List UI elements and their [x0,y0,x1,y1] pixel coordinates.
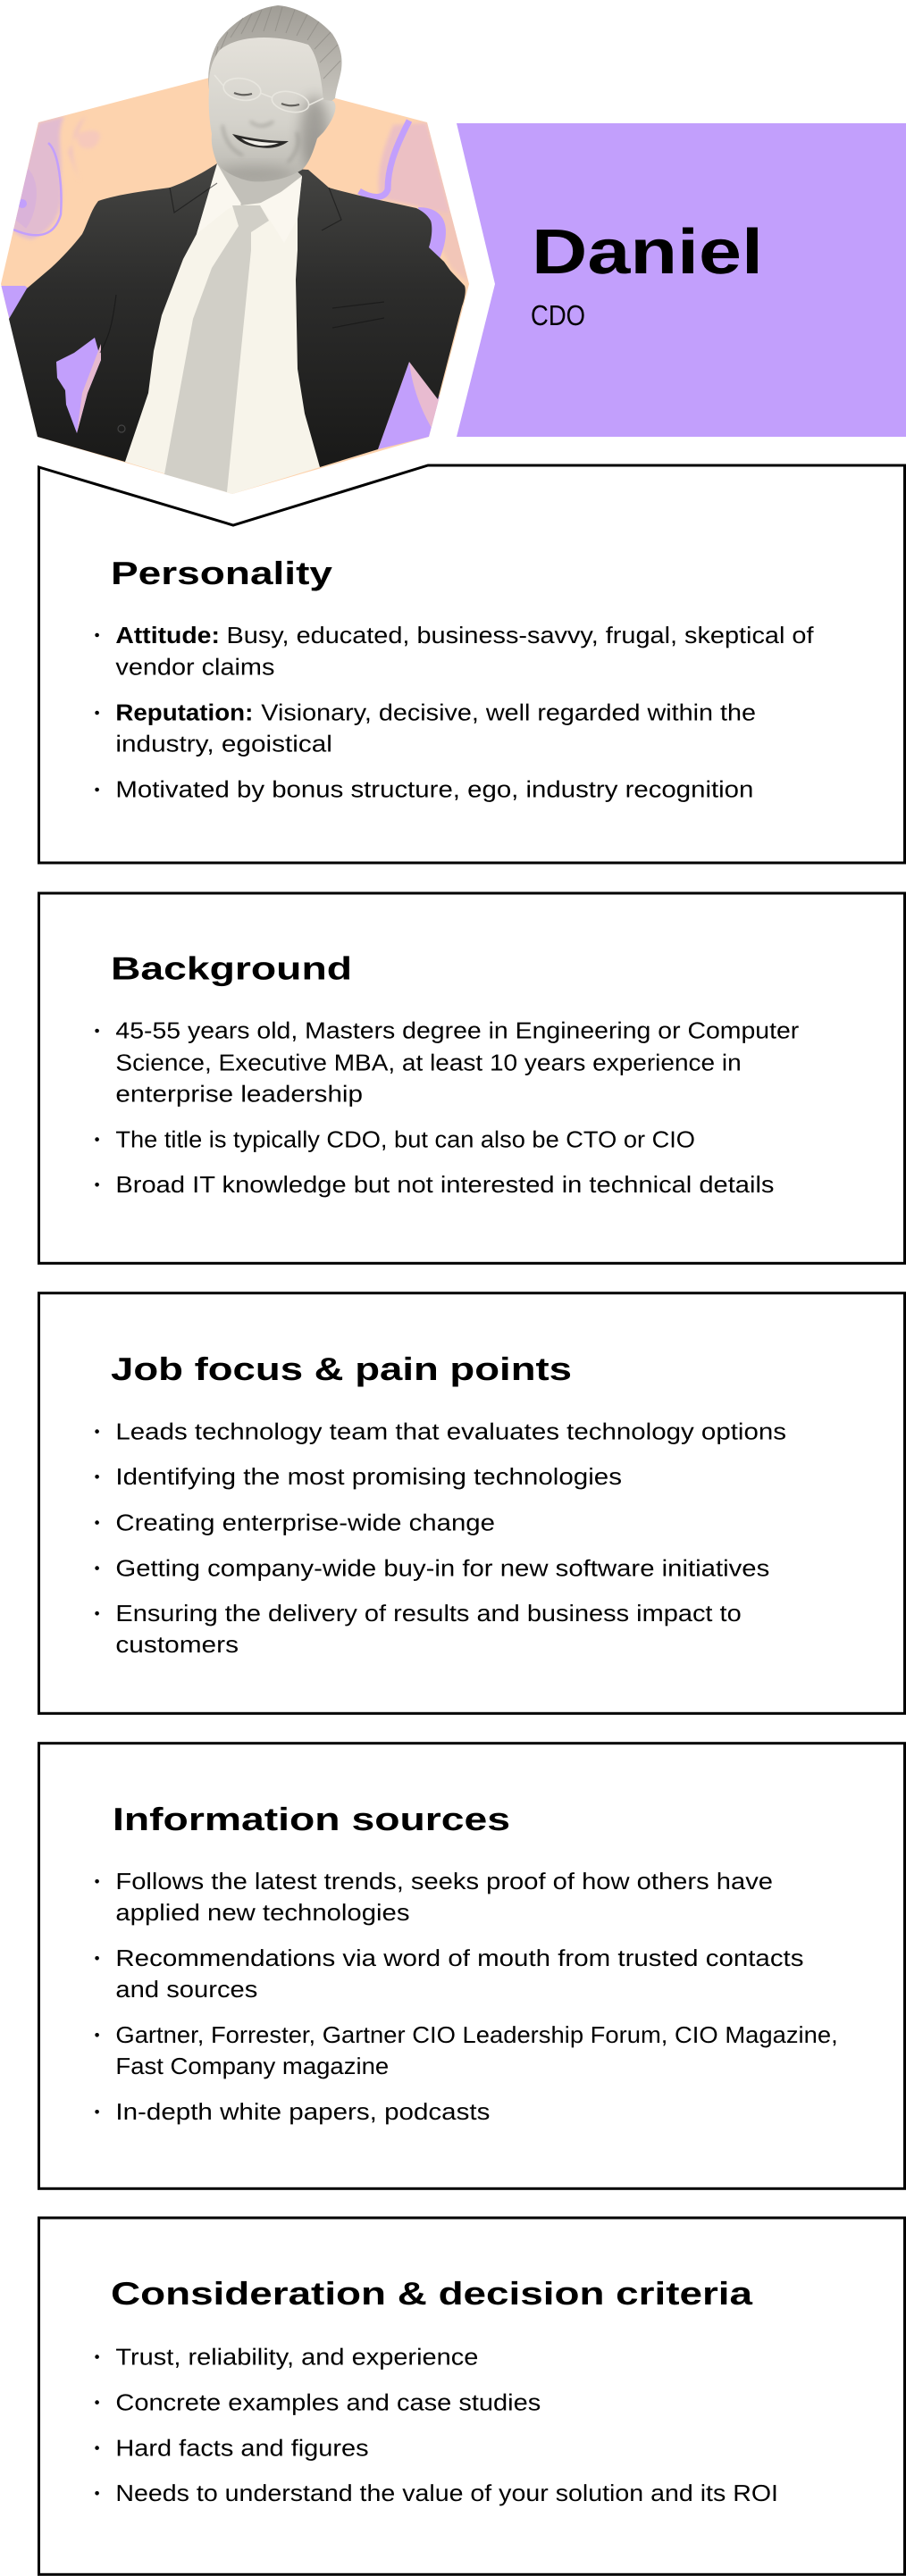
shirt [125,163,320,494]
shirt collar [197,165,241,234]
face [209,38,335,182]
list: job focus: Creating enterprise-wide change [115,1509,495,1535]
list: information sources: Follows the latest trends, seeks proof of how others have [115,1868,773,1894]
portrait: man in suit on marble octagon [0,5,474,500]
heading: job focus: Job focus & pain points [111,1351,572,1387]
octagon marble background [0,63,474,500]
eyes and nose [234,93,299,105]
heading: personality: Personality [111,555,332,591]
glasses [214,75,323,115]
name: Daniel [532,217,763,288]
list: information sources: Fast Company magazine [115,2053,389,2079]
role: CDO [531,299,585,331]
list: personality: Visionary, decisive, well regarded within the [261,699,756,726]
list: information sources: In-depth white papers, podcasts [115,2098,490,2125]
list: job focus: Leads technology team that evaluates technology options [115,1418,786,1444]
heading: information sources: Information sources [113,1801,510,1837]
list: personality: Motivated by bonus structure, ego, industry recognition [115,776,753,803]
list: job focus: customers [115,1631,239,1658]
list: personality: vendor claims [115,654,274,681]
heading: consideration: Consideration & decision criteria [111,2275,753,2312]
list: background [95,1017,800,1198]
list: information sources: applied new technologies [115,1899,409,1926]
list: consideration: Concrete examples and case studies [115,2388,541,2415]
list: information sources [95,1868,838,2125]
list: consideration: Trust, reliability, and experience [115,2343,478,2370]
list: consideration [95,2343,778,2506]
heading: background: Background [111,950,352,987]
name banner [457,123,906,437]
list: personality: industry, egoistical [115,731,332,757]
panel: background [39,893,904,1263]
list: personality [95,622,814,803]
panel: personality [39,465,904,863]
list: job focus: Ensuring the delivery of results and business impact to [115,1600,742,1627]
list: background: Broad IT knowledge but not interested in technical details [115,1171,774,1198]
list: consideration: Hard facts and figures [115,2434,369,2461]
list: background: enterprise leadership [115,1080,363,1107]
list: personality: Attitude: [115,622,220,648]
list: consideration: Needs to understand the value of your solution and its ROI [115,2480,778,2506]
list: information sources: Gartner, Forrester, Gartner CIO Leadership Forum, CIO Magazine, [115,2021,838,2048]
jacket details [100,183,384,353]
hair [208,5,342,109]
list: background: 45-55 years old, Masters degree in Engineering or Computer [115,1017,800,1044]
tie [164,205,269,492]
list: personality: Reputation: [115,699,253,726]
list: background: The title is typically CDO, but can also be CTO or CIO [115,1125,695,1152]
list: job focus [95,1418,786,1658]
list: job focus: Getting company-wide buy-in for new software initiatives [115,1554,769,1581]
gap between arm and body [56,338,101,433]
panel: consideration and decision criteria [39,2218,904,2574]
list: background: Science, Executive MBA, at least 10 years experience in [115,1049,742,1075]
neck [217,152,302,205]
suit jacket [9,163,466,467]
smile [232,134,289,148]
list: information sources: and sources [115,1976,257,2003]
list: job focus: Identifying the most promising technologies [115,1463,622,1490]
list: personality: Busy, educated, business-savvy, frugal, skeptical of [227,622,814,648]
panel: job focus and pain points [39,1293,904,1713]
panel: information sources [39,1744,904,2188]
list: information sources: Recommendations via word of mouth from trusted contacts [115,1945,803,1971]
